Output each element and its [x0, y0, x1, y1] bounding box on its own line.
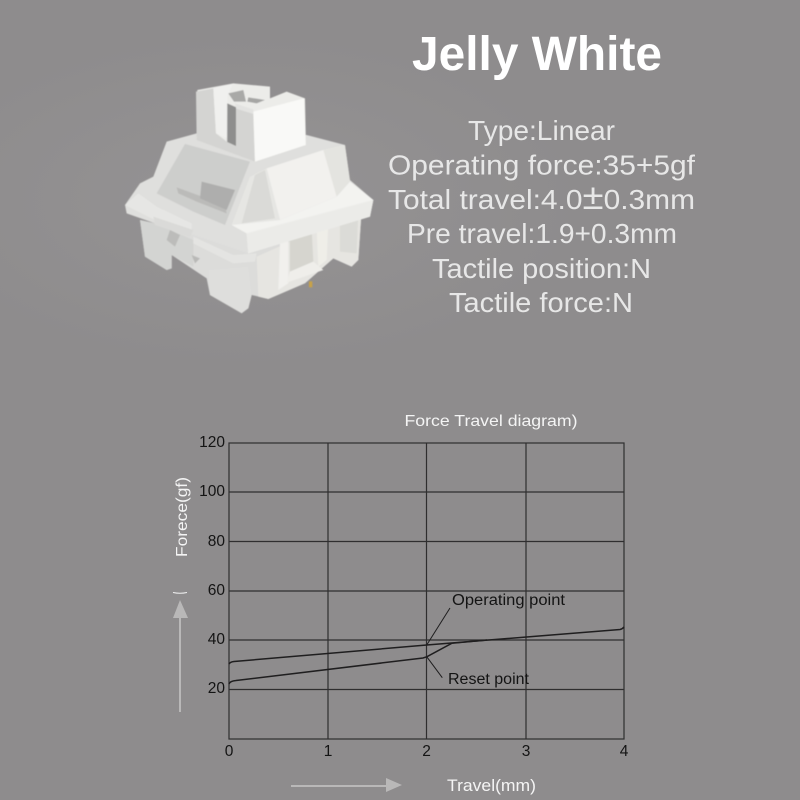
leader lines [427, 608, 450, 678]
text block: specifications: Type:Linear [468, 115, 615, 146]
housing dome [125, 133, 373, 253]
icon: keyboard switch [125, 83, 373, 313]
callout: reset point: Reset point [448, 671, 530, 688]
housing rim [232, 182, 373, 253]
x axis labels: 0 [225, 743, 234, 760]
y axis title: Forece(gf) [174, 477, 191, 557]
x axis labels: 1 [324, 743, 332, 760]
y axis labels: 80 [208, 533, 225, 550]
y axis labels: 40 [208, 631, 225, 648]
text block: specifications: Tactile force:N [449, 287, 633, 318]
text block: specifications [388, 115, 695, 318]
title: Jelly White [412, 28, 662, 81]
text block: specifications: Total travel:4.0 ±0.3mm [388, 176, 695, 217]
stem [197, 83, 306, 162]
text block: specifications: Tactile position:N [432, 253, 651, 284]
x axis title: Travel(mm) [447, 776, 536, 795]
y axis labels: 120 [199, 434, 225, 451]
callout: operating point: Operating point [452, 592, 566, 609]
y axis labels: 20 [208, 680, 225, 697]
text block: specifications: Pre travel:1.9+0.3mm [407, 218, 677, 249]
x axis labels: 4 [620, 743, 629, 760]
x axis labels: 3 [522, 743, 530, 760]
arrow: force axis [173, 600, 188, 712]
arrow: travel axis [291, 778, 402, 792]
band under rim [193, 237, 257, 263]
chart title: Force Travel diagram) [404, 413, 578, 430]
curve: release [229, 640, 487, 684]
y axis labels: 60 [208, 582, 225, 599]
x axis labels [225, 743, 629, 760]
y axis labels [199, 434, 225, 697]
gold pin [309, 281, 312, 287]
y axis labels: 100 [199, 483, 225, 500]
text block: specifications: Operating force:35+5gf [388, 150, 695, 180]
mark above arrow [173, 592, 187, 594]
curve: press [229, 627, 624, 664]
housing lower body [140, 210, 362, 313]
line chart: force travel diagram [199, 434, 629, 760]
housing right face [267, 145, 345, 220]
grid [229, 443, 624, 739]
x axis labels: 2 [422, 743, 431, 760]
